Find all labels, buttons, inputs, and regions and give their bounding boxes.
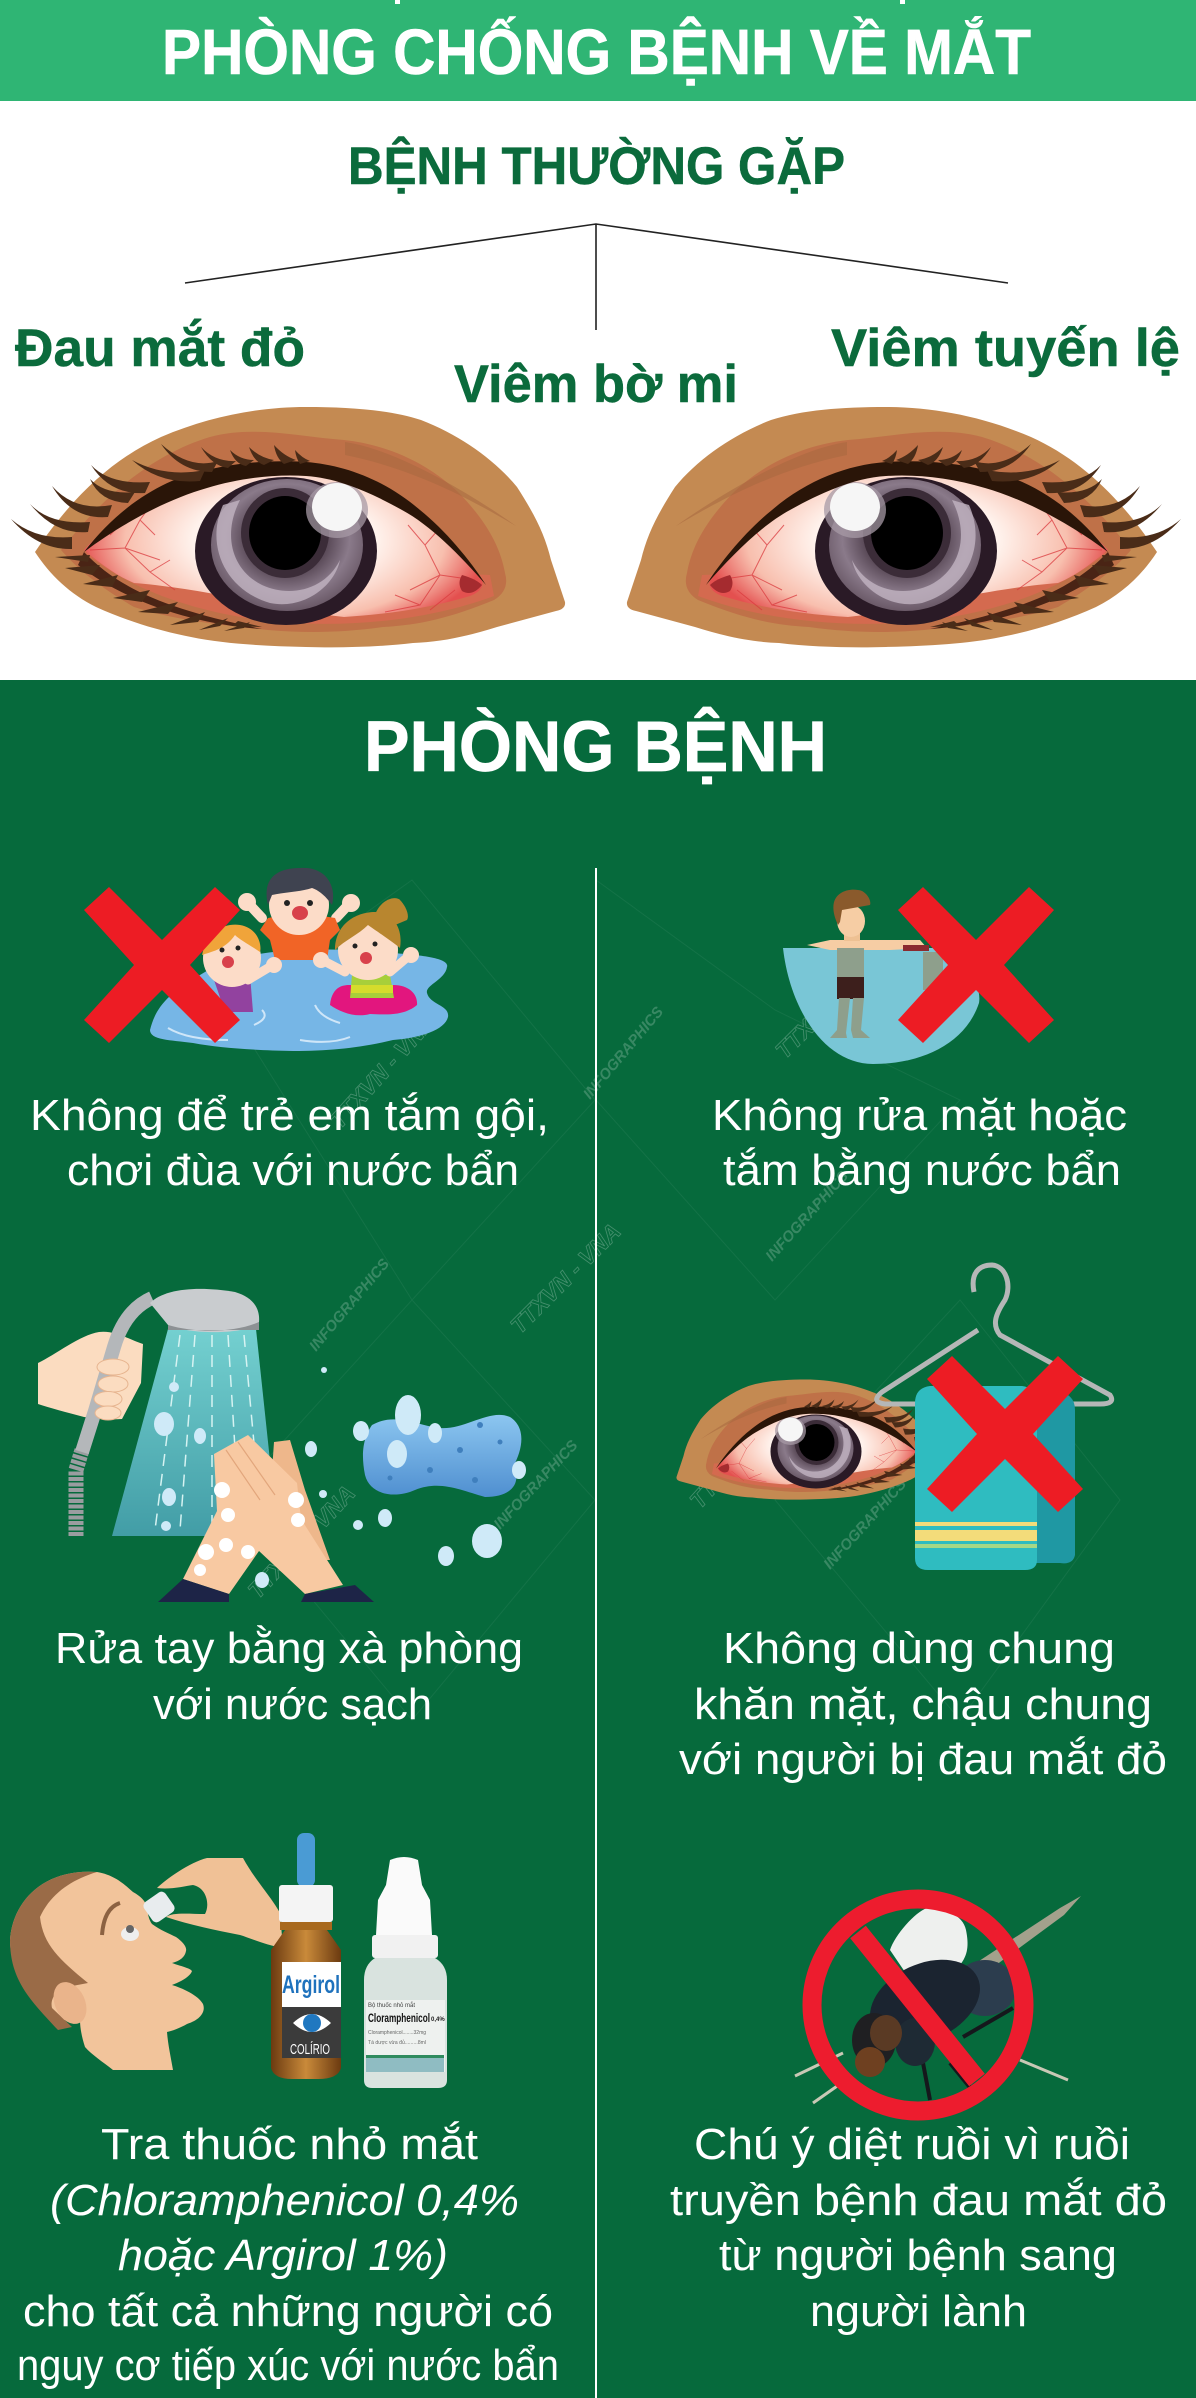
- caption: tắm bằng nước bẩn: [723, 1146, 1121, 1195]
- watermarks: TTXVN - VNA: [243, 1480, 360, 1603]
- icon: man in basin: [783, 890, 979, 1064]
- label: red eye: Đau mắt đỏ: [15, 318, 305, 378]
- icon: Chloramphenicol bottle: 0,4%: [431, 2017, 445, 2023]
- icon: Chloramphenicol bottle: Bộ thuốc nhỏ mắt: [368, 2002, 415, 2009]
- caption: Không rửa mặt hoặc: [712, 1091, 1127, 1140]
- icon: left red eye: [11, 407, 565, 647]
- icon: prohibition sign: [812, 1899, 1024, 2111]
- panel: title banner: [0, 0, 1196, 101]
- panel: common diseases: [11, 135, 1181, 647]
- icon: right red eye: [627, 407, 1181, 647]
- caption: với người bị đau mắt đỏ: [679, 1735, 1167, 1784]
- icon: man applying drops: [10, 1858, 283, 2070]
- icon: Chloramphenicol bottle: [364, 1857, 447, 2088]
- item: wash hands: [38, 1289, 526, 1729]
- caption: [17, 2120, 559, 2390]
- icon: Argirol bottle: [271, 1833, 341, 2079]
- column divider: [595, 868, 597, 2398]
- watermarks: INFOGRAPHICS: [263, 937, 356, 1031]
- item: do not share towels: [676, 1265, 1167, 1784]
- watermarks: INFOGRAPHICS: [306, 1256, 393, 1355]
- caption: Rửa tay bằng xà phòng: [55, 1624, 523, 1673]
- connector lines: [185, 224, 1008, 330]
- watermarks: INFOGRAPHICS: [820, 1476, 910, 1573]
- icon: red cross: [898, 887, 1054, 1043]
- icon: Chloramphenicol bottle: Tá dược vừa đủ.........8ml: [368, 2039, 426, 2046]
- watermarks: INFOGRAPHICS: [762, 1168, 852, 1265]
- caption: chơi đùa với nước bẩn: [67, 1146, 519, 1195]
- watermarks: INFOGRAPHICS: [580, 1004, 667, 1103]
- caption: Chú ý diệt ruồi vì ruồi: [694, 2120, 1130, 2169]
- label: dacryoadenitis: Viêm tuyến lệ: [831, 319, 1180, 378]
- icon: small red eye: [676, 1380, 954, 1500]
- icon: red cross: [927, 1356, 1083, 1512]
- panel: prevention: [0, 680, 1196, 2398]
- caption: với nước sạch: [153, 1680, 432, 1729]
- item: eye drops: [10, 1833, 559, 2390]
- icon: children in pool: [150, 868, 448, 1051]
- icon: towel: [915, 1386, 1075, 1570]
- icon: sponge and bubbles: [154, 1367, 526, 1588]
- caption: hoặc Argirol 1%): [118, 2231, 448, 2280]
- watermarks: TTXVN - VNA: [770, 943, 891, 1064]
- title: PHÒNG CHỐNG BỆNH VỀ MẮT: [162, 15, 1031, 88]
- watermarks: TTXVN - VNA: [324, 1009, 440, 1133]
- caption: Không để trẻ em tắm gội,: [30, 1091, 549, 1140]
- caption: truyền bệnh đau mắt đỏ: [670, 2176, 1167, 2225]
- caption: [670, 2120, 1167, 2336]
- icon: Chloramphenicol bottle: Cloramphenicol........32mg: [368, 2030, 426, 2036]
- caption: [679, 1624, 1167, 1784]
- icon: Chloramphenicol bottle: Cloramphenicol: [368, 2011, 430, 2025]
- watermarks: TTXVN - VNA: [505, 1218, 626, 1339]
- watermarks: INFOGRAPHICS: [490, 1437, 581, 1533]
- caption: Không dùng chung: [723, 1624, 1115, 1673]
- caption: [55, 1624, 523, 1729]
- label: blepharitis: Viêm bờ mi: [454, 355, 738, 414]
- icon: shower: [38, 1289, 278, 1536]
- watermarks: [243, 937, 910, 1603]
- item: children in dirty water: [30, 868, 549, 1195]
- caption: [30, 1091, 549, 1195]
- icon: Argirol bottle: Argirol: [282, 1971, 340, 1999]
- item: kill flies: [670, 1896, 1167, 2336]
- caption: Tra thuốc nhỏ mắt: [101, 2120, 478, 2169]
- icon: hanger: [877, 1265, 1112, 1404]
- icon: fly: [795, 1896, 1081, 2103]
- caption: cho tất cả những người có: [23, 2287, 553, 2336]
- caption: người lành: [810, 2287, 1027, 2336]
- caption: (Chloramphenicol 0,4%: [50, 2176, 519, 2225]
- icon: soap hands: [158, 1435, 374, 1602]
- icon: red cross: [84, 887, 240, 1043]
- icon: Argirol bottle: COLÍRIO: [290, 2041, 330, 2058]
- item: do not wash with dirty water: [712, 887, 1127, 1195]
- caption: khăn mặt, chậu chung: [694, 1680, 1152, 1729]
- watermarks: TTXVN - VNA: [684, 1389, 800, 1513]
- heading: common diseases: BỆNH THƯỜNG GẶP: [348, 135, 845, 196]
- caption: từ người bệnh sang: [719, 2231, 1117, 2280]
- caption: nguy cơ tiếp xúc với nước bẩn: [17, 2341, 559, 2390]
- caption: [712, 1091, 1127, 1195]
- heading: prevention: PHÒNG BỆNH: [364, 707, 827, 787]
